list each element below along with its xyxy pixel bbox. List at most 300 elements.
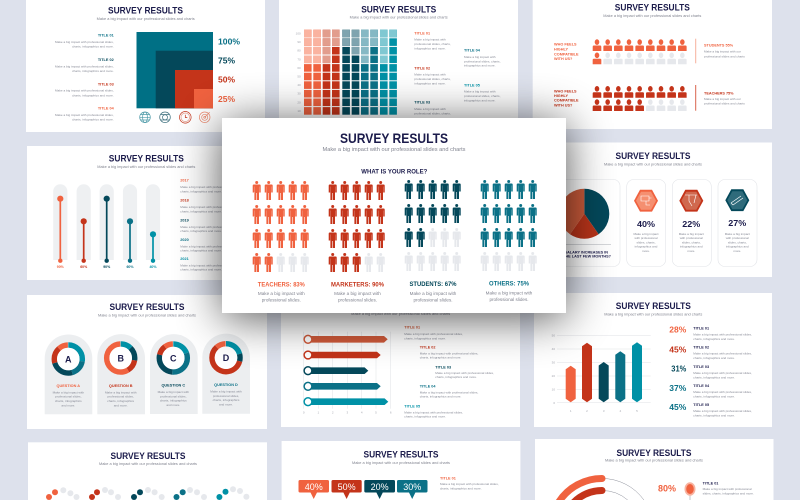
subheading: Make a big impact with our professional slides and charts — [97, 165, 196, 169]
text block: titles: Make a big impact with professional slides, — [55, 64, 114, 68]
text blocks: charts, infographics and more. — [420, 395, 461, 399]
donut A — [54, 345, 82, 373]
bust rows: red — [593, 86, 687, 111]
percent values: 37% — [669, 384, 686, 393]
text blocks: charts, infographics and more. — [435, 375, 477, 379]
text blocks: charts, infographics and more. — [693, 376, 735, 380]
text blocks: charts, infographics and more. — [693, 395, 735, 399]
year text blocks: 2019 — [180, 218, 189, 222]
text block: titles: infographics and more. — [414, 81, 446, 85]
label: marketers: MARKETERS: 90% — [331, 282, 384, 289]
y axis labels — [552, 334, 555, 405]
text block: titles: Make a big impact with — [464, 55, 496, 59]
text block: titles: charts, infographics and more. — [72, 45, 114, 49]
percent labels — [218, 36, 240, 104]
title: SURVEY RESULTS — [340, 130, 448, 146]
donut D — [212, 344, 240, 372]
y axis labels: 50 — [552, 334, 555, 338]
description: others: professional slides. — [489, 297, 529, 302]
donut C — [159, 344, 187, 372]
text blocks: Make a big impact with professional slides, — [404, 332, 463, 336]
icon: hexagon — [679, 190, 703, 212]
label: students: STUDENTS: 67% — [410, 281, 457, 288]
description A: Make a big impact with — [53, 390, 84, 394]
heading: SURVEY RESULTS — [616, 448, 692, 459]
year text blocks — [180, 179, 230, 272]
percent labels: 75% — [218, 55, 235, 65]
year text blocks: charts, infographics and more. — [180, 268, 222, 272]
text blocks — [404, 326, 494, 418]
text block: titles: charts, infographics and more. — [72, 69, 114, 73]
bar 1 — [304, 335, 388, 343]
icon: hexagon — [634, 190, 658, 212]
description: with professional — [680, 236, 703, 240]
heading: SURVEY RESULTS — [616, 301, 691, 312]
y axis labels: 40 — [552, 347, 555, 351]
axis labels: 90 — [297, 40, 301, 44]
tag 30%: 30% — [403, 482, 422, 493]
value labels: 90% — [57, 265, 65, 269]
y axis labels: 0 — [553, 401, 555, 405]
text block: Make a big impact with professional slides, — [440, 482, 499, 486]
percent values: 45% — [669, 403, 686, 412]
description B: Make a big impact with — [105, 390, 137, 394]
lollipop tracks — [53, 184, 160, 260]
description B: professional slides, — [108, 395, 134, 399]
description B: charts, infographics — [107, 399, 135, 403]
letter B: B — [117, 353, 124, 363]
result: students: professional slides and charts — [704, 54, 745, 58]
text blocks: TITLE 04 — [693, 384, 710, 388]
y axis labels: 10 — [552, 388, 555, 392]
value labels: 40% — [149, 265, 157, 269]
donut centre D — [215, 346, 237, 369]
text block: titles: TITLE 04 — [98, 107, 115, 111]
year text blocks: Make a big impact with professional — [180, 225, 230, 229]
tag 50% — [332, 480, 362, 499]
question: students: WITH US? — [554, 57, 573, 61]
percent values — [669, 326, 686, 412]
axis labels: 70 — [297, 57, 301, 61]
description C: Make a big impact with — [158, 390, 189, 394]
percent values: 28% — [669, 326, 686, 335]
result: students: Make a big impact with our — [704, 50, 741, 54]
centre panel shadow — [222, 123, 566, 318]
card: 27% — [718, 180, 757, 266]
text blocks: charts, infographics and more. — [404, 414, 446, 418]
slide: hexagonal bar chart — [534, 293, 772, 427]
bar 5 — [304, 398, 388, 406]
text block: titles: professional slides, charts, — [464, 59, 501, 63]
text block: titles: TITLE 02 — [414, 66, 430, 70]
donut centre C — [162, 347, 185, 369]
text block: charts, infographics and more. — [440, 486, 482, 490]
text blocks: Make a big impact with professional slides, — [693, 352, 752, 356]
question: teachers: COMPATIBLE — [554, 99, 579, 103]
question: teachers: HIGHLY — [554, 94, 568, 98]
card: question A — [45, 334, 92, 414]
year text blocks: 2021 — [180, 257, 189, 261]
description A: professional slides, — [55, 395, 82, 399]
result: teachers: Make a big impact with our — [704, 97, 741, 101]
text block: titles: Make a big impact with — [414, 107, 446, 111]
text blocks: Make a big impact with professional slides, — [693, 371, 752, 375]
text blocks: TITLE 04 — [420, 385, 436, 389]
subheading: Make a big impact with our professional slides and charts — [97, 17, 195, 21]
text blocks: charts, infographics and more. — [693, 356, 735, 360]
pin marker — [684, 482, 696, 500]
people grid: teachers — [253, 181, 309, 272]
slide: dotted arcs — [28, 442, 267, 500]
bar 2 — [304, 351, 381, 359]
description: teachers: Make a big impact with — [258, 291, 305, 296]
value labels — [57, 265, 157, 269]
text block: titles: Make a big impact with — [414, 38, 446, 42]
subheading: Make a big impact with our professional slides and charts — [350, 16, 448, 20]
lollipop 3 — [104, 196, 110, 263]
text block: titles: TITLE 01 — [98, 34, 114, 38]
result: students — [704, 44, 745, 58]
donut centre A — [57, 348, 80, 370]
bust rows: orange — [593, 39, 687, 64]
text blocks: charts, infographics and more. — [693, 414, 735, 418]
description — [633, 232, 659, 253]
donut B — [107, 344, 135, 372]
description: infographics and — [635, 245, 658, 249]
axis labels — [303, 410, 392, 414]
text blocks: charts, infographics and more. — [404, 336, 446, 340]
description: others: Make a big impact with — [486, 290, 533, 296]
text block: titles: charts, infographics and more. — [72, 93, 114, 97]
description D: Make a big impact with — [210, 390, 242, 394]
axis labels: 20 — [297, 100, 301, 104]
letter C: C — [170, 353, 177, 363]
description: students: professional slides. — [413, 298, 453, 303]
description: more. — [733, 249, 741, 253]
description: teachers: professional slides. — [262, 298, 301, 303]
text block: TITLE 01 — [440, 476, 456, 480]
heading: SURVEY RESULTS — [364, 450, 438, 461]
year text blocks: charts, infographics and more. — [180, 209, 222, 213]
subheading: Make a big impact with our professional slides and charts — [604, 162, 702, 166]
card: question C — [150, 334, 198, 414]
panel: what is your role — [222, 118, 566, 313]
x axis labels: 3 — [603, 409, 605, 413]
text block: titles — [414, 31, 501, 115]
text block: titles — [55, 34, 115, 122]
result: teachers — [704, 91, 745, 106]
percent labels: 25% — [218, 94, 235, 104]
text block: titles: professional slides, charts, — [414, 112, 451, 116]
heading: SURVEY RESULTS — [616, 151, 690, 162]
text block: titles: infographics and more. — [464, 64, 496, 68]
value labels: 60% — [126, 265, 134, 269]
y axis labels: 30 — [552, 360, 555, 364]
value labels: 90% — [103, 265, 111, 269]
result: teachers: professional slides and charts — [704, 102, 745, 106]
heading: SURVEY RESULTS — [110, 302, 184, 313]
text block: titles: Make a big impact with professional slides, — [55, 113, 114, 117]
description C: charts, infographics — [160, 399, 187, 403]
description: slides, charts, — [728, 240, 747, 244]
label D: QUESTION D — [214, 383, 238, 387]
description: infographics and — [680, 245, 703, 249]
pie question — [563, 250, 612, 259]
text blocks: TITLE 02 — [420, 346, 436, 350]
description: teachers — [258, 291, 305, 303]
tag 20%: 20% — [371, 482, 389, 493]
description D: charts, infographics — [213, 398, 240, 402]
description: with professional — [726, 236, 749, 240]
text blocks: TITLE 02 — [693, 346, 709, 350]
lollipop 2 — [81, 218, 87, 263]
subheading: Make a big impact with our professional slides and charts — [604, 312, 703, 316]
people grid: others — [481, 180, 537, 271]
lollipop 1 — [57, 196, 63, 263]
axis labels: 30 — [297, 92, 301, 96]
description: slides, charts, — [637, 240, 656, 244]
axis labels: 6 — [390, 410, 392, 414]
year text blocks: Make a big impact with professional — [180, 205, 230, 209]
slide: pie and hexagon cards — [535, 142, 772, 277]
subheading: Make a big impact with our professional slides and charts — [98, 313, 196, 317]
grid lines — [557, 335, 651, 403]
question: students: COMPATIBLE — [554, 52, 579, 56]
red arc — [571, 487, 606, 500]
year text blocks: 2017 — [180, 179, 189, 183]
bars — [566, 342, 642, 402]
text block: titles: TITLE 03 — [98, 82, 114, 86]
text blocks: Make a big impact with professional slides, — [420, 352, 478, 356]
text block: titles: TITLE 01 — [414, 31, 430, 35]
description: slides, charts, — [682, 240, 701, 244]
card: pie chart — [545, 180, 620, 266]
question: teachers: WITH US? — [554, 103, 573, 107]
text blocks: charts, infographics and more. — [420, 356, 461, 360]
grey dots — [60, 486, 249, 500]
text blocks: TITLE 01 — [693, 326, 709, 330]
question: teachers — [554, 89, 579, 107]
description: more. — [687, 249, 695, 253]
text block: titles: Make a big impact with — [464, 90, 496, 94]
heading: SURVEY RESULTS — [109, 154, 184, 165]
description: Make a big impact — [725, 232, 750, 236]
x axis labels: 5 — [636, 409, 638, 413]
description: marketers: Make a big impact with — [334, 291, 381, 296]
label: others: OTHERS: 75% — [489, 280, 529, 288]
text block: TITLE 01 — [703, 481, 718, 485]
year text blocks: Make a big impact with professional — [180, 185, 230, 189]
divider: red — [695, 85, 696, 111]
bar 3 — [304, 367, 368, 375]
question: teachers: WHO FEELS — [554, 89, 577, 93]
percent: 40% — [637, 220, 655, 229]
description A — [53, 390, 84, 408]
text blocks: Make a big impact with professional slides, — [435, 371, 494, 375]
percent labels: 50% — [218, 75, 235, 85]
description: Make a big impact — [633, 232, 659, 236]
text block — [703, 481, 754, 495]
text block: titles: infographics and more. — [414, 46, 446, 50]
text block: titles: professional slides, charts, — [414, 77, 451, 81]
text block: titles: infographics and more. — [464, 98, 496, 102]
divider: orange — [695, 39, 696, 63]
text blocks: charts, infographics and more. — [693, 337, 735, 341]
pie question: SALARY INCREASES IN — [565, 250, 608, 254]
description D — [210, 390, 242, 406]
label A: QUESTION A — [57, 384, 80, 388]
subheading: Make a big impact with our professional slides and charts — [603, 14, 702, 18]
axis labels — [296, 32, 301, 113]
lollipop 5 — [150, 231, 156, 263]
description A: charts, infographics — [55, 399, 82, 403]
slide: lollipop chart — [27, 146, 266, 280]
description: marketers — [334, 291, 381, 303]
description — [725, 232, 750, 253]
slide: horizontal arrow bars — [281, 292, 520, 427]
text block: titles: TITLE 04 — [464, 49, 481, 53]
subtitle: Make a big impact with our professional slides and charts — [322, 147, 466, 153]
card: 22% — [672, 180, 711, 266]
subheading: Make a big impact with our professional slides and charts — [605, 459, 703, 463]
value labels: 60% — [80, 265, 88, 269]
people grid: marketers — [329, 181, 385, 272]
text blocks: TITLE 01 — [404, 326, 420, 330]
tag 50%: 50% — [338, 482, 356, 493]
text block: slides, charts, infographics and more. — [703, 491, 754, 495]
tag 40%: 40% — [305, 482, 323, 493]
text blocks: Make a big impact with professional slides, — [693, 332, 752, 336]
text block: titles: Make a big impact with professional slides, — [55, 89, 114, 93]
text blocks: Make a big impact with professional slides, — [693, 409, 752, 413]
orange arc — [556, 475, 606, 500]
text block: titles: Make a big impact with professional slides, — [55, 40, 114, 44]
card: question B — [97, 334, 145, 414]
description: infographics and — [726, 245, 749, 249]
heading: SURVEY RESULTS — [361, 5, 436, 16]
description: marketers: professional slides. — [338, 298, 377, 303]
text block: titles: TITLE 03 — [414, 101, 430, 105]
card: 40% — [627, 180, 666, 266]
axis labels: 3 — [346, 410, 348, 414]
tag 40% — [298, 480, 329, 499]
text block — [440, 476, 499, 490]
description: more. — [642, 249, 650, 253]
heading: SURVEY RESULTS — [108, 6, 183, 17]
percent values: 45% — [669, 345, 686, 354]
pie chart — [559, 189, 609, 239]
text blocks — [693, 326, 752, 418]
question heading: WHAT IS YOUR ROLE? — [361, 169, 427, 176]
percent labels: 100% — [218, 36, 240, 46]
text blocks: Make a big impact with professional slides, — [420, 391, 478, 395]
subheading: Make a big impact with our professional slides and charts — [351, 312, 450, 316]
pie question: THE LAST FEW MONTHS? — [563, 255, 612, 259]
axis labels: 5 — [375, 410, 377, 414]
axis labels: 50 — [297, 74, 301, 78]
lollipop 4 — [127, 218, 133, 263]
slide: concentric arcs — [535, 439, 774, 500]
text block: titles: professional slides, charts, — [464, 94, 501, 98]
description: with professional — [634, 236, 658, 240]
text blocks: TITLE 05 — [404, 404, 420, 408]
letter A: A — [65, 354, 72, 364]
tag 20% — [364, 480, 395, 499]
text block: titles: charts, infographics and more. — [72, 118, 114, 122]
x axis labels: 4 — [619, 409, 621, 413]
x axis labels — [570, 409, 638, 413]
label C: QUESTION C — [161, 384, 185, 388]
description B — [105, 390, 137, 408]
card: question D — [202, 334, 250, 414]
text block: titles: professional slides, charts, — [414, 42, 451, 46]
year text blocks: 2020 — [180, 238, 189, 242]
year text blocks: Make a big impact with professional — [180, 244, 230, 248]
axis labels: 100 — [296, 32, 301, 36]
x axis labels: 2 — [586, 409, 588, 413]
description B: and more. — [114, 404, 128, 408]
description D: and more. — [219, 402, 233, 406]
text block: titles: TITLE 02 — [98, 58, 114, 62]
pie divider — [555, 243, 611, 246]
year text blocks: Make a big impact with professional — [180, 263, 230, 267]
coloured dots — [46, 489, 228, 500]
percent: 80% — [658, 484, 676, 494]
subheading: Make a big impact with our professional slides and charts — [352, 461, 450, 465]
axis labels: 10 — [297, 109, 301, 113]
axis labels: 40 — [297, 83, 301, 87]
text blocks: Make a big impact with professional slides, — [693, 390, 752, 394]
question: students: HIGHLY — [554, 48, 568, 52]
result: teachers: TEACHERS 75% — [704, 91, 734, 95]
year text blocks: charts, infographics and more. — [180, 229, 222, 233]
percent values: 31% — [671, 364, 686, 373]
label B: QUESTION B — [109, 384, 133, 388]
bar 4 — [304, 382, 381, 390]
percent: 27% — [728, 219, 746, 228]
slide: waffle chart — [279, 0, 518, 130]
donut centre B — [109, 347, 132, 369]
description: others — [486, 290, 533, 302]
axis labels: 1 — [317, 410, 319, 414]
description: students: Make a big impact with — [410, 291, 457, 296]
text blocks: TITLE 05 — [693, 403, 709, 407]
slide: donut questions — [27, 295, 267, 429]
axis labels: 0 — [303, 410, 305, 414]
description C — [158, 390, 189, 407]
grid lines — [304, 332, 391, 409]
question: students: WHO FEELS — [554, 43, 577, 47]
text block: Make a big impact with professional — [703, 487, 752, 491]
axis labels: 4 — [361, 410, 363, 414]
text blocks: TITLE 03 — [693, 365, 709, 369]
text blocks: TITLE 03 — [435, 365, 451, 369]
chart: nested squares — [136, 32, 213, 108]
description C: and more. — [166, 403, 180, 407]
subheading: Make a big impact with our professional slides and charts — [99, 462, 197, 466]
question: students — [554, 43, 579, 61]
slide: nested squares chart — [26, 0, 265, 132]
label: teachers: TEACHERS: 83% — [258, 282, 305, 289]
year text blocks: 2018 — [180, 199, 189, 203]
description D: professional slides, — [213, 394, 239, 398]
year text blocks: charts, infographics and more. — [180, 189, 222, 193]
slide: percent tags — [282, 441, 520, 500]
description: students — [410, 291, 457, 303]
tag 30% — [397, 480, 428, 499]
text block: titles: Make a big impact with — [414, 73, 446, 77]
icon: hexagon — [725, 189, 749, 211]
